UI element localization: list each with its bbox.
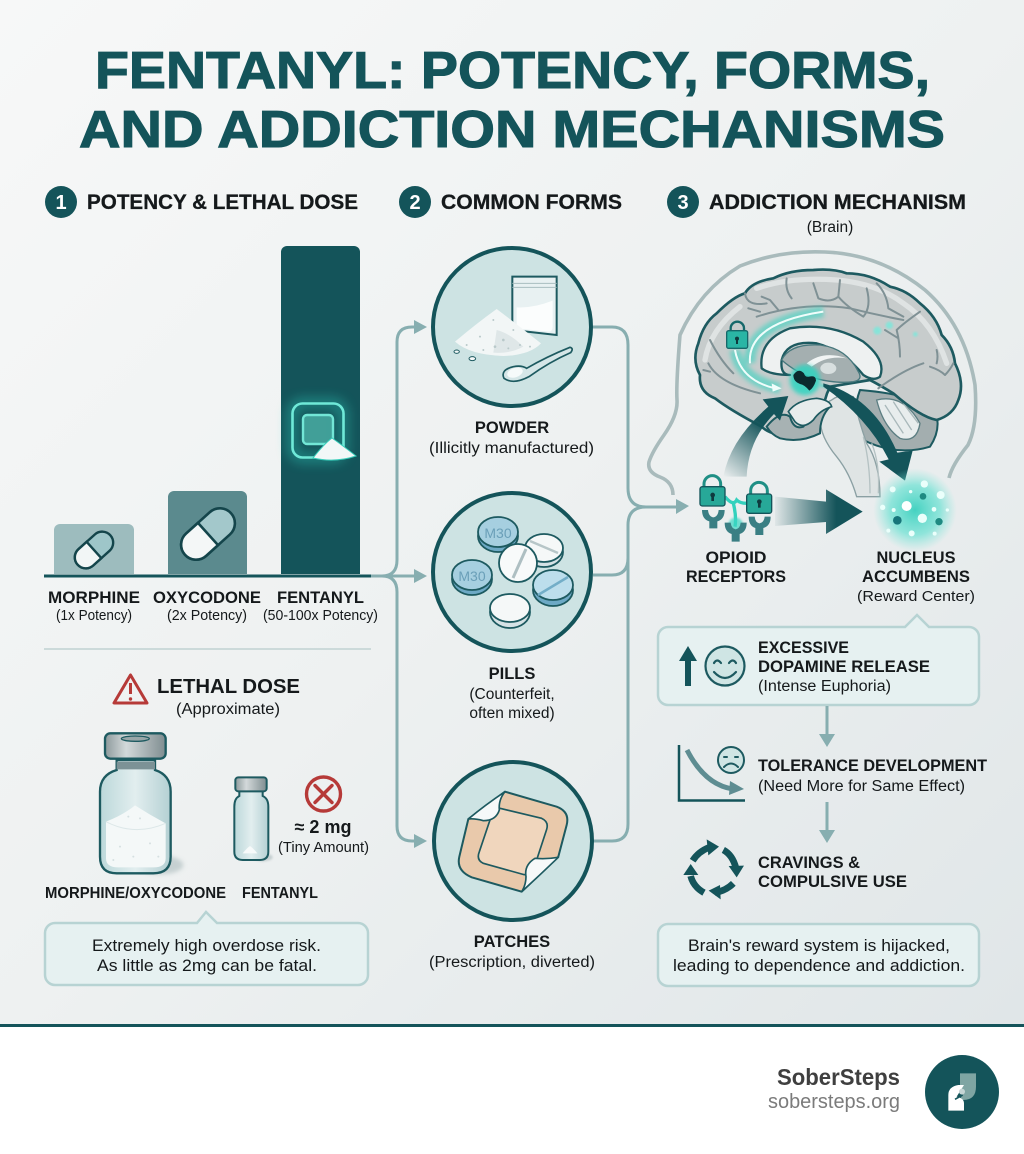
heading: addiction mechanism: (Brain): [807, 219, 853, 236]
icon: logo: [925, 1055, 999, 1129]
bar labels: FENTANYL: [277, 588, 364, 607]
brand name: [768, 1064, 900, 1113]
icon: nucleus accumbens: [873, 468, 957, 552]
text: powder: POWDER: [475, 419, 549, 437]
icon: large vial: [100, 733, 183, 874]
heading: addiction mechanism: [667, 186, 966, 236]
text: cravings: CRAVINGS &: [758, 854, 860, 872]
text: pills: PILLS: [489, 665, 535, 683]
panel: brain diagram: [649, 252, 976, 605]
bar labels: (50-100x Potency): [263, 608, 378, 624]
text: 2 mg: (Tiny Amount): [278, 840, 369, 856]
heading: common forms: COMMON FORMS: [441, 191, 622, 214]
heading: common forms: [399, 186, 622, 218]
text: tolerance: [758, 757, 987, 795]
vial labels: [45, 885, 318, 902]
gyri highlights: [705, 279, 947, 363]
bar labels: OXYCODONE: [153, 588, 261, 607]
icon: brainstem: [767, 385, 880, 497]
heading: potency and lethal dose: POTENCY & LETHAL DOSE: [87, 191, 358, 214]
text: cravings: [758, 854, 907, 891]
heading: common forms: 2: [409, 192, 421, 214]
vial labels: FENTANYL: [242, 885, 318, 902]
text: pills: (Counterfeit,: [469, 686, 555, 703]
heading: addiction mechanism: ADDICTION MECHANISM: [709, 191, 966, 214]
icon: tolerance chart: [679, 745, 745, 800]
brain folds: [703, 278, 953, 393]
heading: potency and lethal dose: [45, 186, 358, 218]
panel: potency bar chart: [44, 246, 371, 576]
text: nucleus accumbens: [857, 549, 975, 605]
callout: dopamine release: EXCESSIVE: [758, 639, 849, 657]
text: tolerance: TOLERANCE DEVELOPMENT: [758, 757, 987, 775]
icon: brain: [695, 270, 961, 450]
arrow: receptors to brain: [723, 396, 788, 477]
callout: dopamine release: (Intense Euphoria): [758, 678, 891, 695]
callout: hijacked reward system: [658, 924, 979, 986]
bar labels: [48, 588, 378, 624]
heading: potency and lethal dose: 1: [55, 192, 67, 214]
text: cravings: COMPULSIVE USE: [758, 873, 907, 891]
text: opioid receptors: OPIOID: [706, 549, 767, 567]
brand name: sobersteps.org: [768, 1091, 900, 1113]
icon: head outline: [649, 252, 976, 495]
icon: brain lock: [727, 322, 748, 348]
text: patches: [429, 933, 595, 971]
bar: fentanyl: [281, 246, 360, 574]
bar labels: (2x Potency): [167, 608, 247, 624]
bar labels: MORPHINE: [48, 588, 140, 607]
bar: morphine: [54, 524, 134, 574]
text: pills: often mixed): [469, 705, 555, 722]
brand name: SoberSteps: [777, 1064, 900, 1090]
text: powder: [429, 419, 594, 457]
icon: pills circle: [433, 493, 591, 651]
callout: overdose risk: Extremely high overdose risk.: [92, 937, 321, 955]
icon: warning triangle: [114, 675, 147, 703]
callout: dopamine release: [658, 615, 979, 705]
heading: lethal dose: [157, 676, 300, 718]
vial labels: MORPHINE/OXYCODONE: [45, 885, 226, 902]
text: nucleus accumbens: (Reward Center): [857, 588, 975, 605]
text: nucleus accumbens: NUCLEUS: [876, 549, 956, 567]
text: 2 mg: ≈ 2 mg: [295, 817, 351, 837]
text: tolerance: (Need More for Same Effect): [758, 778, 965, 795]
icon: powder circle: [433, 248, 591, 406]
glow spots: [873, 322, 918, 337]
text: powder: (Illicitly manufactured): [429, 440, 594, 457]
callout: dopamine release: DOPAMINE RELEASE: [758, 658, 930, 676]
icon: pills circle: M30: [458, 568, 486, 584]
callout: hijacked reward system: leading to dependence and addiction.: [673, 957, 965, 975]
panel: common forms: [429, 248, 595, 971]
icon: small vial: [234, 777, 273, 861]
icon: pills circle: M30: [484, 525, 512, 541]
panel: lethal dose: [45, 675, 369, 985]
title: AND ADDICTION MECHANISMS: [79, 101, 945, 159]
arrow: step down one: [819, 706, 835, 747]
text: opioid receptors: [686, 549, 786, 586]
icon: patches circle: [434, 762, 592, 920]
title: [79, 42, 945, 159]
callout: hijacked reward system: Brain's reward system is hijacked,: [688, 937, 950, 955]
text: patches: (Prescription, diverted): [429, 954, 595, 971]
bar labels: (1x Potency): [56, 608, 132, 624]
icon: cravings cycle: [683, 839, 744, 899]
bar: oxycodone: [168, 491, 247, 574]
callout: overdose risk: [45, 912, 368, 985]
text: opioid receptors: RECEPTORS: [686, 568, 786, 586]
arrow: step down two: [819, 802, 835, 843]
teal pathway glow: [735, 312, 823, 388]
arrow: receptors to nucleus accumbens: [775, 489, 863, 534]
heading: addiction mechanism: 3: [677, 192, 689, 214]
heading: lethal dose: LETHAL DOSE: [157, 676, 300, 698]
text: nucleus accumbens: ACCUMBENS: [862, 568, 970, 586]
cerebellum: [856, 390, 938, 450]
teal pathway: [735, 350, 775, 388]
limbic arc: [761, 327, 881, 379]
connector arrows out of forms: [593, 327, 689, 841]
heading: lethal dose: (Approximate): [176, 701, 280, 718]
text: 2 mg: [278, 817, 369, 856]
footer: [0, 1024, 1024, 1154]
text: pills: [469, 665, 555, 722]
cerebrum: [695, 270, 961, 435]
callout: overdose risk: As little as 2mg can be fatal.: [97, 957, 317, 975]
icon: danger x: [306, 777, 340, 811]
icon: opioid receptors: [700, 476, 772, 542]
title: FENTANYL: POTENCY, FORMS,: [95, 42, 930, 100]
text: patches: PATCHES: [474, 933, 550, 951]
panel: addiction steps: [658, 615, 987, 986]
connector arrows into forms: [371, 320, 427, 848]
arrow: brain to nucleus accumbens: [823, 383, 913, 481]
